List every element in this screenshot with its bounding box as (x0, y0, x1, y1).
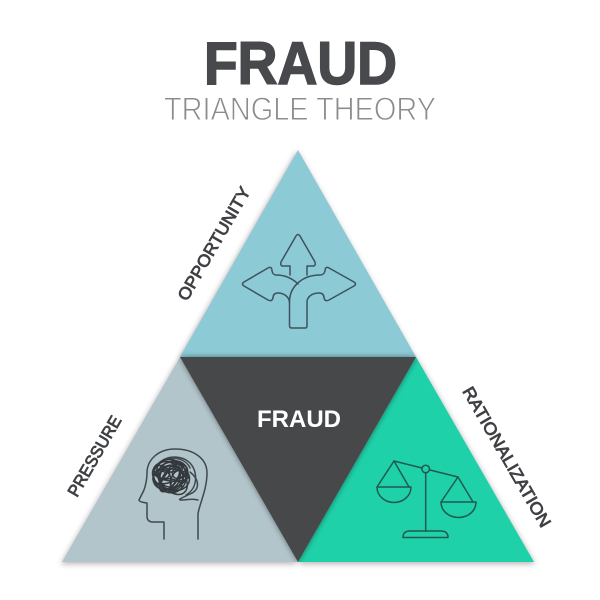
icon: three-way arrows (242, 234, 356, 328)
panel: rationalization triangle (298, 357, 535, 564)
subtitle: TRIANGLE THEORY (164, 91, 436, 127)
panel: pressure triangle (61, 357, 298, 564)
label: pressure: PRESSURE (64, 413, 125, 500)
center label: FRAUD (257, 406, 341, 433)
panel: fraud center triangle (180, 357, 416, 562)
panel: opportunity triangle (179, 150, 416, 359)
icon: balance scale (377, 461, 476, 538)
icon: head with tangled thoughts (139, 449, 207, 539)
label: opportunity: OPPORTUNITY (174, 184, 254, 304)
label: rationalization: RATIONALIZATION (459, 384, 554, 531)
title: FRAUD (204, 30, 397, 97)
